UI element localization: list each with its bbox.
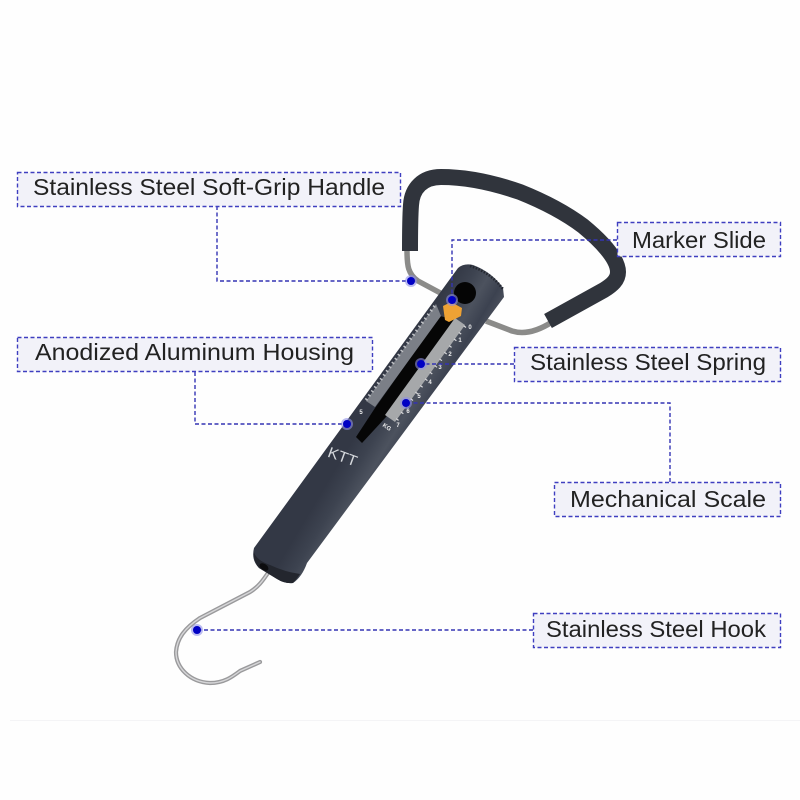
label: Marker Slide: Marker Slide (632, 227, 766, 253)
scale numbers: 4 (428, 380, 432, 386)
scale numbers: 2 (448, 352, 452, 358)
scale numbers: 5 (417, 394, 421, 400)
footer line (10, 720, 800, 721)
dot: marker slide (446, 294, 458, 306)
right scale strip (385, 318, 465, 422)
scale numbers: 0 (468, 325, 472, 331)
scale numbers: 7 (396, 423, 400, 429)
hook hole (454, 282, 476, 304)
slot (356, 316, 456, 443)
leader: spring (421, 363, 514, 365)
right strip ticks (397, 325, 466, 420)
left strip ticks (366, 304, 436, 400)
housing (253, 264, 504, 583)
knurled top edge (470, 266, 503, 289)
label: Stainless Steel Spring (514, 348, 780, 382)
label: Anodized Aluminum Housing: Anodized Aluminum Housing (35, 339, 354, 365)
leader: marker slide (452, 240, 617, 300)
label: Mechanical Scale: Mechanical Scale (570, 486, 766, 512)
scale numbers (359, 325, 472, 433)
dot: housing (341, 418, 353, 430)
label: Stainless Steel Soft-Grip Handle (18, 172, 400, 206)
scale numbers: KG (381, 423, 392, 433)
label: Stainless Steel Spring: Stainless Steel Spring (530, 349, 766, 375)
label: Stainless Steel Hook (534, 614, 780, 648)
dot: handle (405, 275, 417, 287)
left scale strip (366, 304, 441, 407)
leader: mechanical scale (406, 403, 670, 482)
icon: soft-grip handle (410, 177, 618, 321)
leader: hook (197, 629, 533, 631)
label: Mechanical Scale (554, 482, 780, 516)
label: Marker Slide (618, 222, 780, 256)
marker slide (443, 302, 462, 322)
scale body (253, 264, 504, 583)
label: Anodized Aluminum Housing (18, 338, 372, 372)
hook holes (258, 562, 270, 572)
dot: mechanical scale (400, 397, 412, 409)
icon: stainless steel hook (176, 570, 270, 683)
leader: housing (195, 372, 347, 424)
dot: spring (415, 358, 427, 370)
icon: handle wire (407, 250, 552, 333)
brand logo: KTT (325, 444, 359, 470)
scale numbers: 1 (458, 338, 462, 344)
leader: handle (217, 206, 411, 281)
scale numbers: 5 (359, 410, 363, 416)
label: Stainless Steel Hook: Stainless Steel Hook (546, 616, 767, 642)
scale numbers: 6 (406, 409, 410, 415)
label: Stainless Steel Soft-Grip Handle: Stainless Steel Soft-Grip Handle (33, 174, 385, 200)
bottom end cap (254, 552, 300, 583)
dot: hook (191, 624, 203, 636)
scale numbers: 3 (438, 365, 442, 371)
